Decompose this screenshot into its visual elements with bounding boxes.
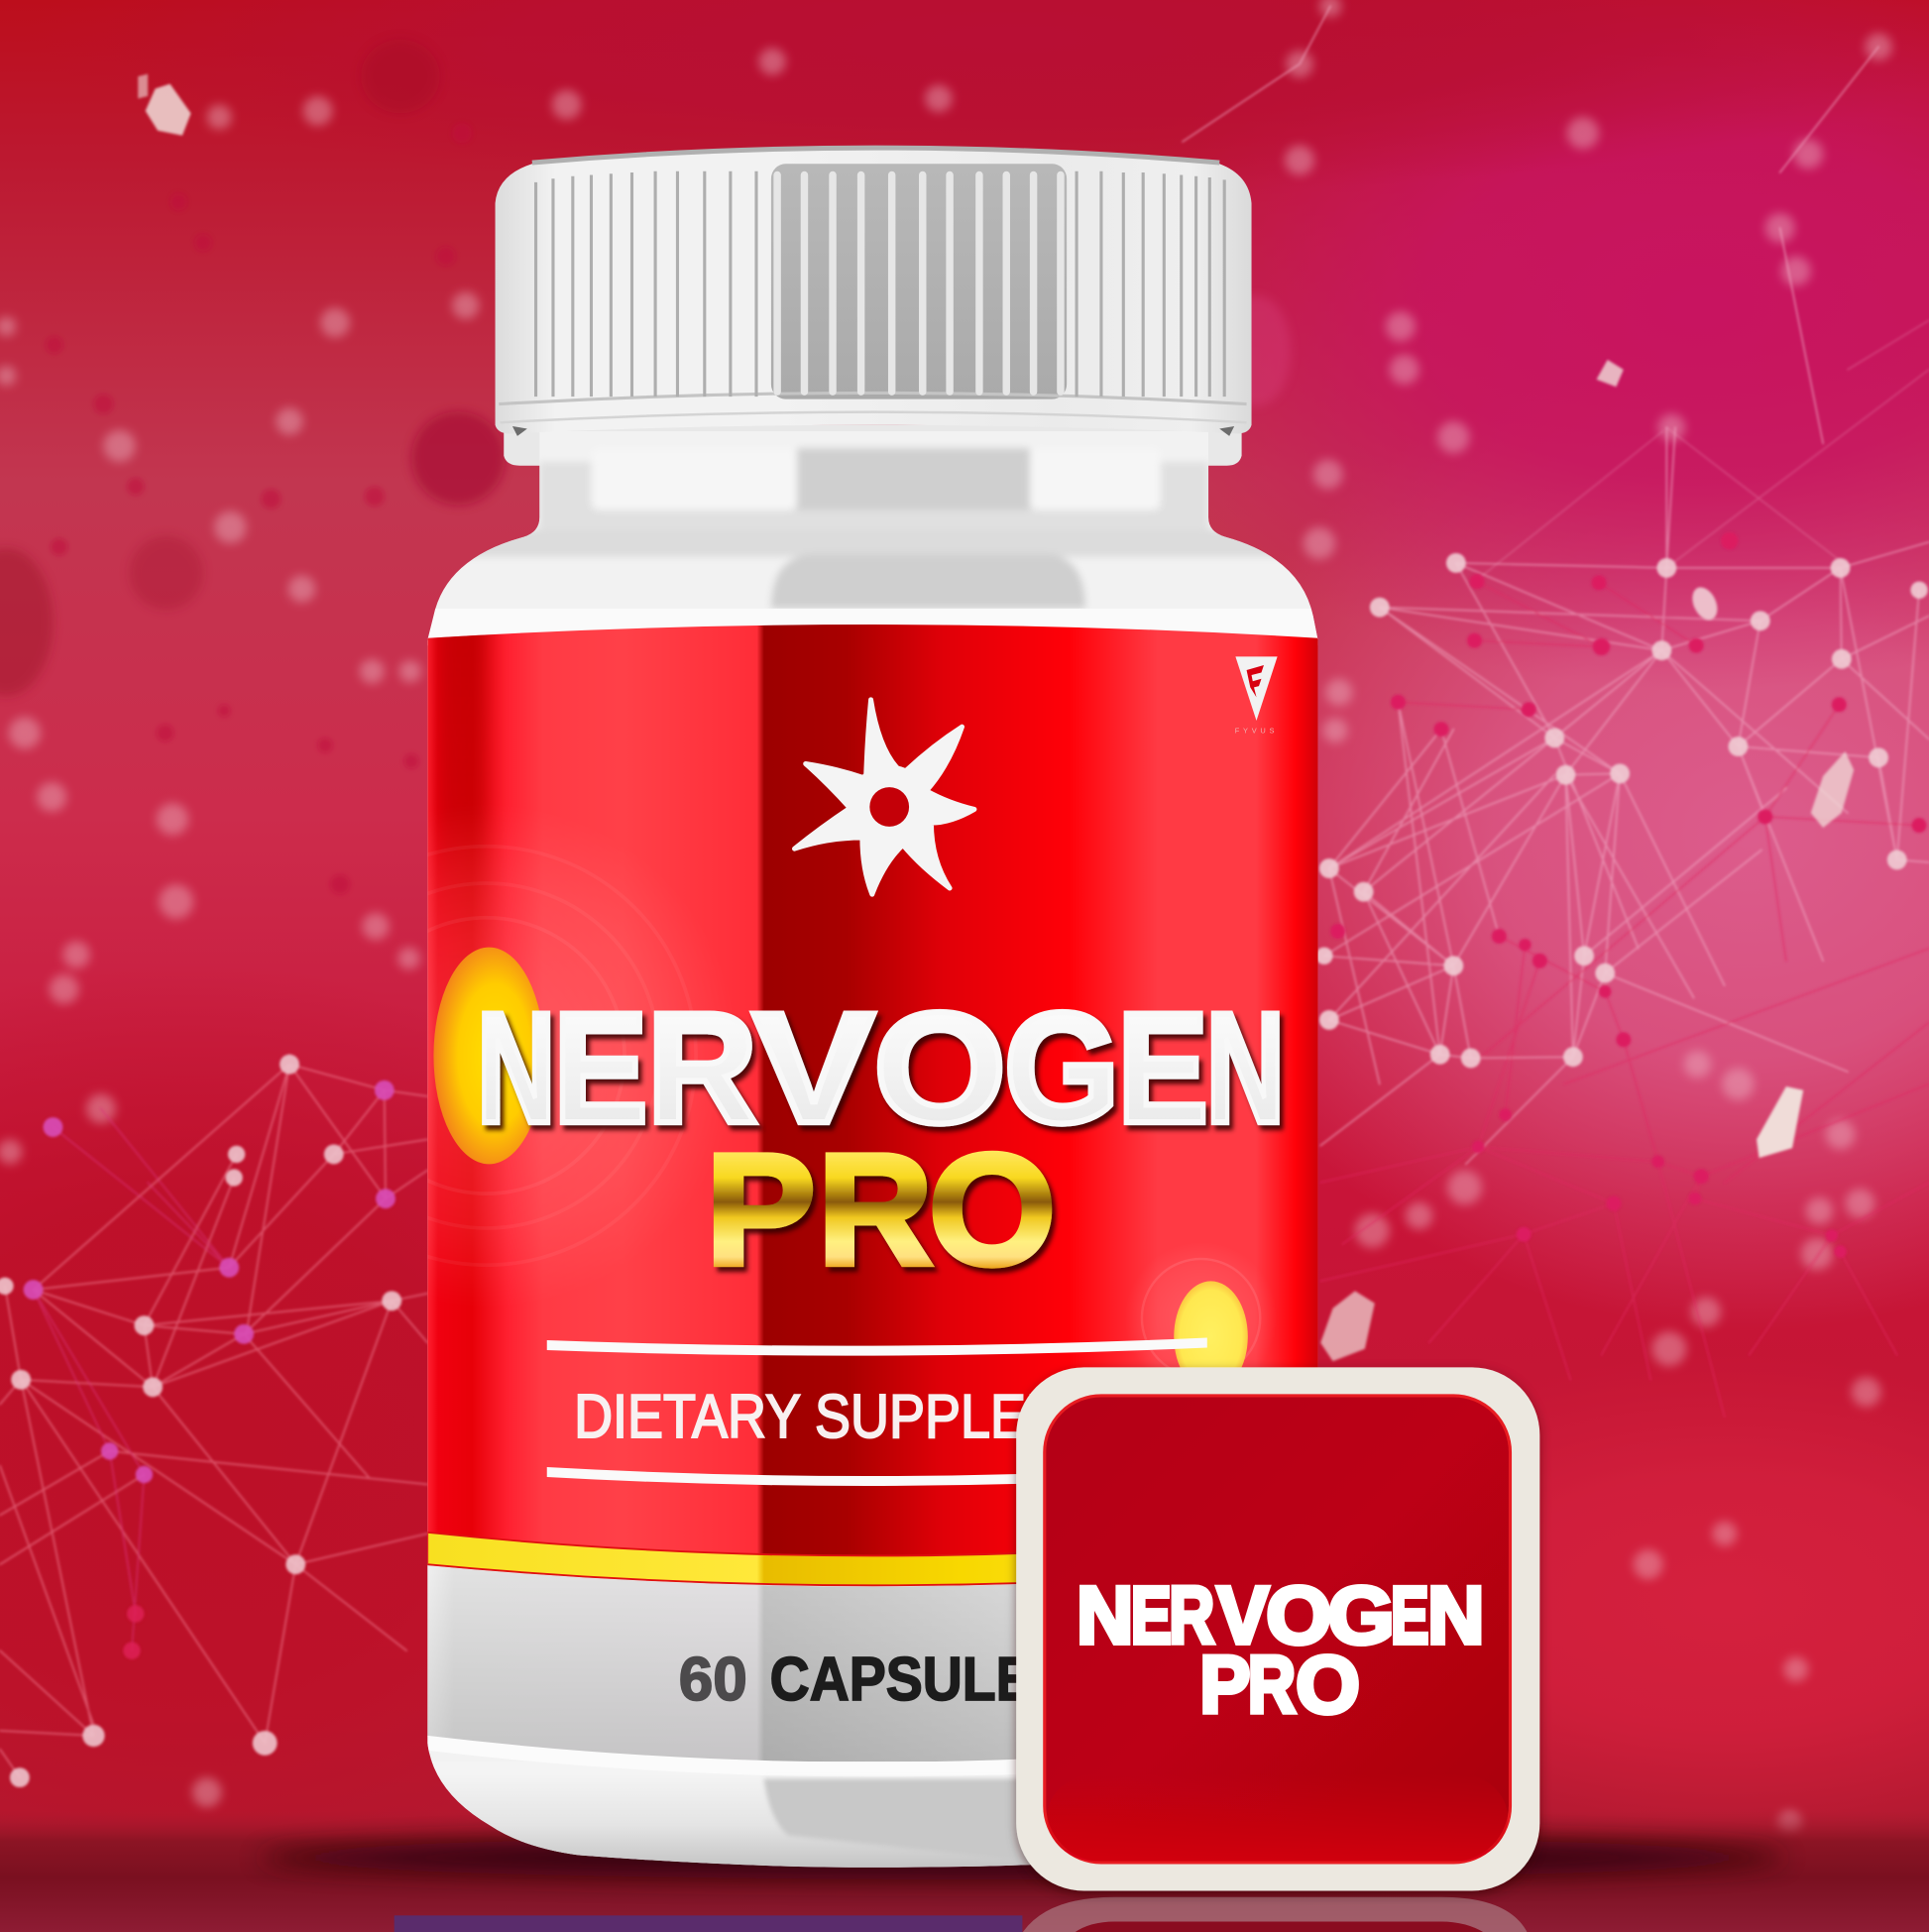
small dark pink dots upper left xyxy=(46,123,472,894)
yellow band xyxy=(427,1532,1017,1586)
floating white flakes xyxy=(138,74,1854,1361)
network: lines on the left xyxy=(0,1065,427,1777)
product name: PRO: O xyxy=(929,1121,1056,1298)
neuron star logo xyxy=(795,700,974,894)
grey band xyxy=(427,1565,1318,1763)
product name: NERVOGEN: N xyxy=(1206,979,1285,1156)
badge name: N xyxy=(1427,1571,1484,1661)
badge PRO: P xyxy=(1199,1640,1250,1730)
badge red panel xyxy=(1045,1396,1510,1863)
badge name: R xyxy=(1169,1571,1214,1661)
product name: NERVOGEN: E xyxy=(553,979,648,1156)
left yellow spot with rings xyxy=(428,840,698,1272)
badge name: V xyxy=(1217,1571,1269,1661)
product bottle xyxy=(234,146,1330,1873)
floor with contact shadow xyxy=(0,1811,1929,1932)
capsule count: 60 xyxy=(679,1646,747,1714)
product name: NERVOGEN: R xyxy=(646,979,757,1156)
badge PRO: O xyxy=(1296,1640,1360,1730)
product name: NERVOGEN: G xyxy=(1004,979,1120,1156)
top divider line xyxy=(547,1338,1207,1356)
brand mark FYVUS xyxy=(1235,656,1278,735)
badge name: O xyxy=(1266,1571,1331,1661)
dietary supplement text: DIETARY SUPPLEMENT xyxy=(574,1383,1178,1451)
neck shading xyxy=(473,446,1275,609)
network: nodes xyxy=(0,532,1928,1787)
badge name: G xyxy=(1328,1571,1395,1661)
capsule count: CAPSULES xyxy=(770,1646,1070,1714)
bottle body xyxy=(427,431,1318,1868)
cap centre ridges xyxy=(777,174,1061,392)
product name: NERVOGEN: N xyxy=(477,979,555,1156)
neck flange xyxy=(504,425,1242,466)
cap ridges xyxy=(536,171,1224,397)
badge name: E xyxy=(1391,1571,1428,1661)
badge name: N xyxy=(1077,1571,1133,1661)
product name: PRO: R xyxy=(818,1121,933,1298)
red label xyxy=(427,625,1318,1554)
network: lines on the right xyxy=(1183,6,1929,1417)
product name: NERVOGEN: O xyxy=(873,979,1006,1156)
product name: PRO: P xyxy=(706,1121,816,1298)
right yellow spot with rings xyxy=(1138,1256,1264,1368)
bottle cap xyxy=(496,146,1252,436)
brand mark FYVUS: FYVUS xyxy=(1235,726,1278,735)
badge PRO: R xyxy=(1248,1640,1296,1730)
bottom rim xyxy=(419,1762,1330,1873)
square badge xyxy=(1016,1367,1539,1890)
bottom divider line xyxy=(547,1466,1207,1486)
reflection of the badge on the floor xyxy=(1022,1897,1528,1932)
badge name: E xyxy=(1131,1571,1172,1661)
product name: NERVOGEN: V xyxy=(752,979,874,1156)
product name: NERVOGEN: E xyxy=(1117,979,1208,1156)
